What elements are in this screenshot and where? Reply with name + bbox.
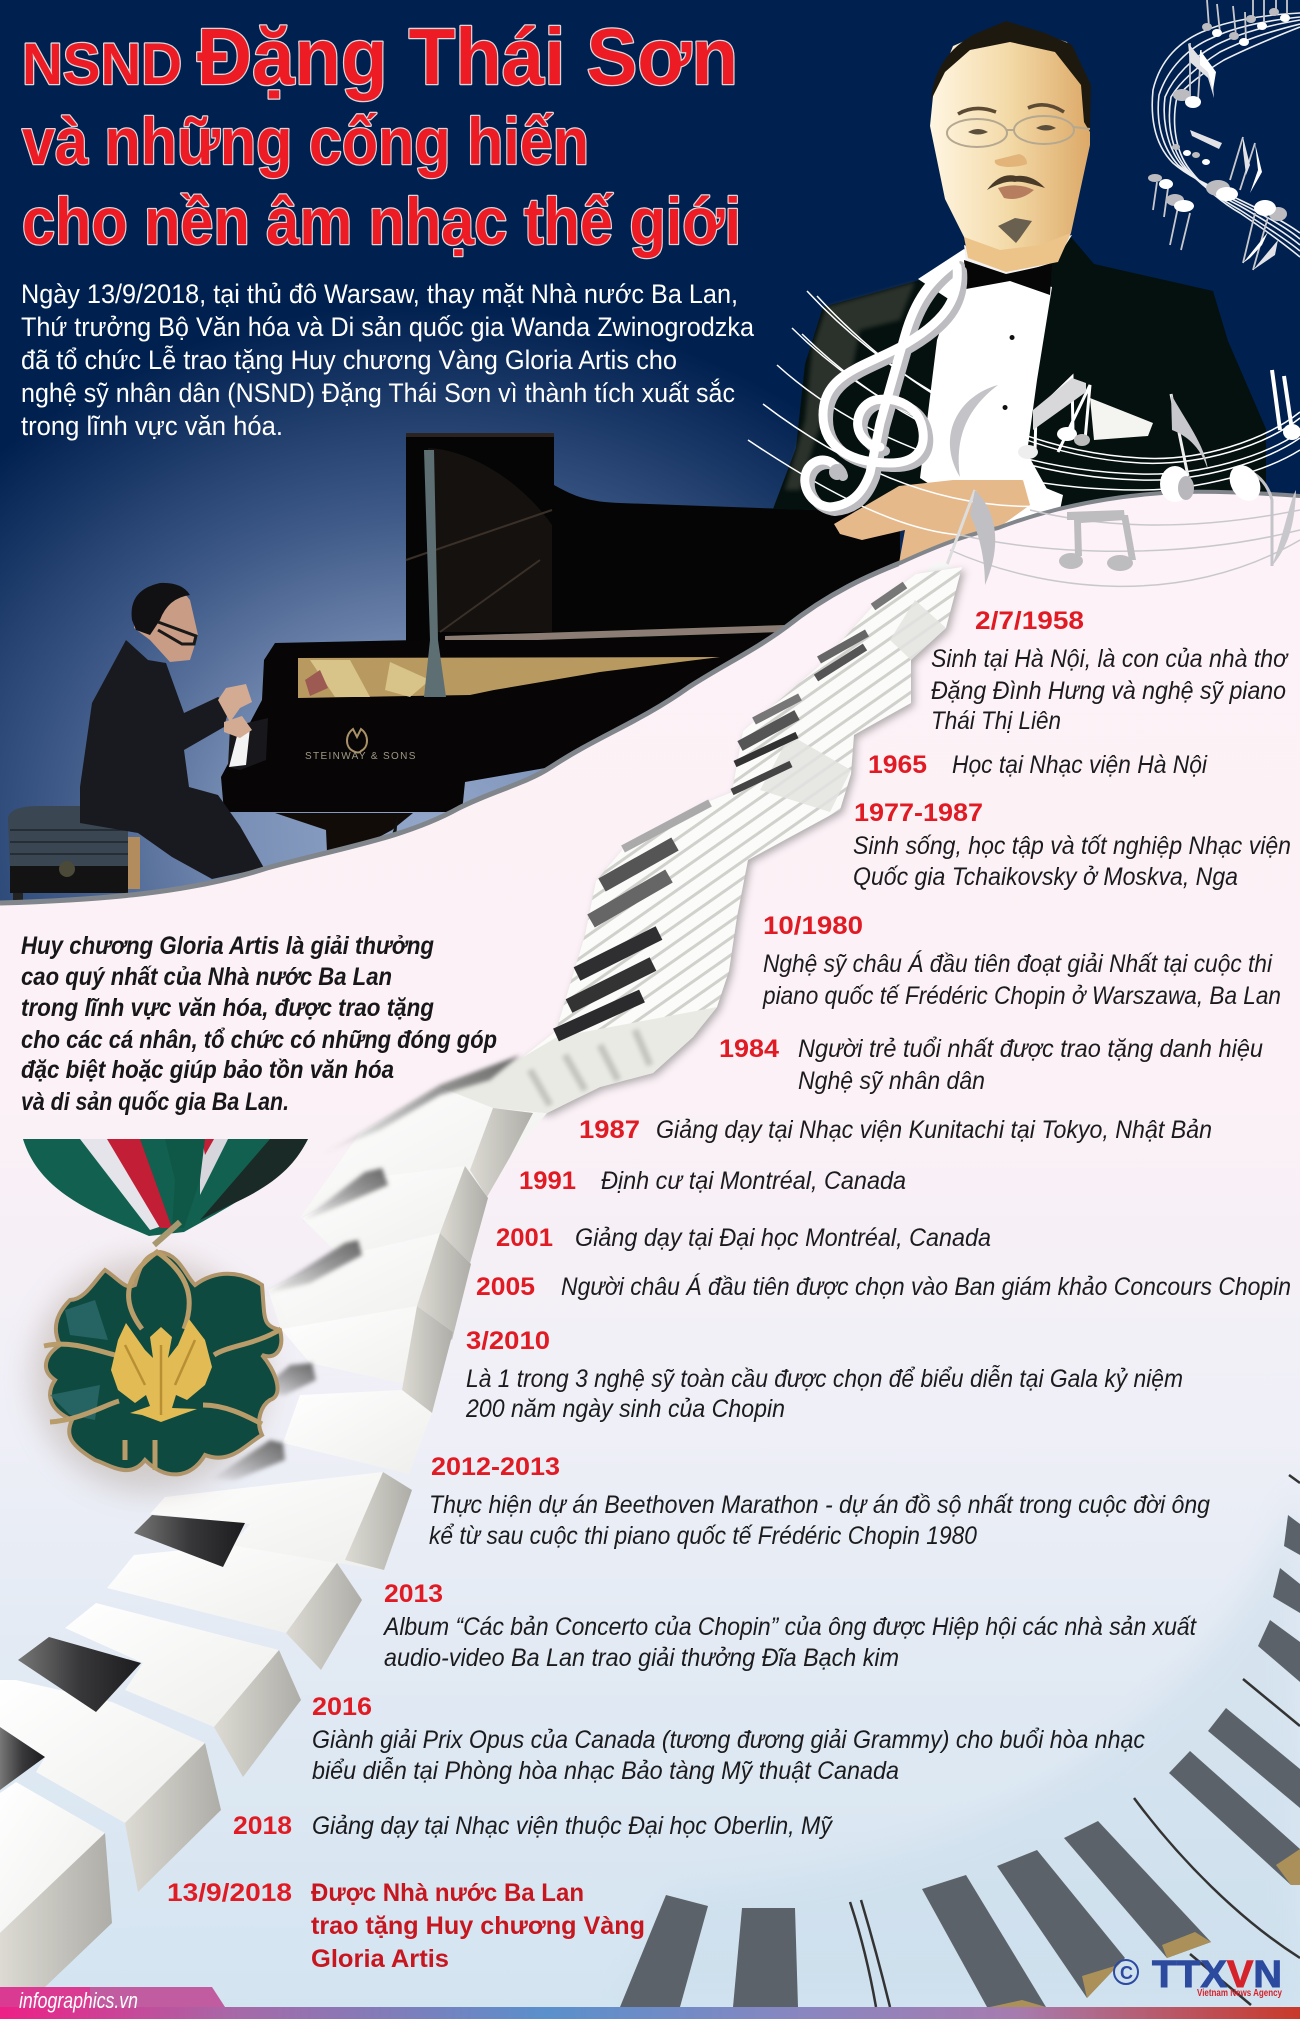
milestone 2012-2013: kể từ sau cuộc thi piano quốc tế Frédéric Chopin 1980 xyxy=(429,1522,977,1550)
medal soft shadow xyxy=(32,1257,268,1493)
beamed note on pink xyxy=(1059,510,1136,571)
piano lid xyxy=(406,433,900,720)
ribbon xyxy=(23,1139,308,1236)
milestone 1965: 1965 xyxy=(868,751,927,779)
mouth xyxy=(998,185,1034,199)
moustache xyxy=(987,175,1045,190)
tall note at right edge xyxy=(1223,370,1300,566)
agency caption: Vietnam News Agency xyxy=(1197,1988,1282,1999)
title: NSND xyxy=(22,32,182,97)
piano lid rim xyxy=(445,625,785,643)
head xyxy=(134,585,198,662)
glasses xyxy=(947,116,1090,147)
hands xyxy=(218,684,252,738)
milestone 2012-2013: Thực hiện dự án Beethoven Marathon - dự án đồ sộ nhất trong cuộc đời ông xyxy=(429,1491,1210,1519)
footer bar xyxy=(0,1987,1300,2019)
intro text block: đã tổ chức Lễ trao tặng Huy chương Vàng Gloria Artis cho xyxy=(21,344,677,375)
milestone 2018: 2018 xyxy=(233,1812,292,1840)
ribbon fold highlights xyxy=(760,600,946,812)
piano lid prop xyxy=(424,450,446,697)
milestone 1991: Định cư tại Montréal, Canada xyxy=(601,1167,906,1195)
note heads xyxy=(1148,8,1287,221)
milestone 1977-1987: 1977-1987 xyxy=(854,799,983,827)
piano legs xyxy=(275,813,413,852)
callout: Gloria Artis description: cao quý nhất của Nhà nước Ba Lan xyxy=(21,963,392,991)
gold key highlights xyxy=(990,1849,1300,2007)
neck and face xyxy=(964,233,1071,272)
upper ribbon shadow xyxy=(443,570,965,1116)
piano body xyxy=(221,640,800,812)
title: cho nền âm nhạc thế giới xyxy=(22,184,741,258)
jacket shoulder highlight xyxy=(785,282,915,490)
collar xyxy=(964,235,1072,276)
soft black keys row xyxy=(210,1055,520,1480)
hand xyxy=(834,480,1030,563)
callout: Gloria Artis description: cho các cá nhân, tổ chức có những đóng góp xyxy=(21,1026,497,1054)
jacket xyxy=(773,237,1266,528)
piano bench xyxy=(8,806,140,902)
milestone 3/2010: Là 1 trong 3 nghệ sỹ toàn cầu được chọn để biểu diễn tại Gala kỷ niệm xyxy=(466,1364,1183,1393)
milestone 2018: Giảng dạy tại Nhạc viện thuộc Đại học Oberlin, Mỹ xyxy=(312,1812,833,1840)
callout: Gloria Artis description: và di sản quốc gia Ba Lan. xyxy=(21,1088,289,1116)
milestone 1991: 1991 xyxy=(519,1167,576,1195)
medal ring xyxy=(154,1222,180,1245)
milestone 1984 xyxy=(719,1035,1263,1095)
medal gold veins xyxy=(44,1252,281,1470)
milestone 2001: 2001 xyxy=(496,1224,553,1252)
milestone 1984: Nghệ sỹ nhân dân xyxy=(798,1067,985,1095)
milestone 2013: 2013 xyxy=(384,1580,443,1608)
milestone 3/2010: 3/2010 xyxy=(466,1327,550,1355)
milestone 2013 xyxy=(382,1580,1197,1672)
dark keys xyxy=(620,1515,1300,2007)
intro text block: Ngày 13/9/2018, tại thủ đô Warsaw, thay mặt Nhà nước Ba Lan, xyxy=(21,279,738,309)
decoration: staff lines across the portrait xyxy=(748,291,1300,586)
milestone 13/9/2018: Gloria Artis xyxy=(311,1945,449,1973)
thin key separators xyxy=(850,1475,1300,2007)
logo: TTXVN xyxy=(1114,1954,1282,1999)
eyebrows xyxy=(958,105,1064,114)
intro text block: Thứ trưởng Bộ Văn hóa và Di sản quốc gia Wanda Zwinogrodzka xyxy=(21,312,755,342)
large black keys xyxy=(0,1515,245,1790)
milestone 13/9/2018 xyxy=(167,1879,645,1973)
enamel flower xyxy=(46,1252,281,1474)
medal: Gloria Artis xyxy=(23,1139,308,1493)
panel: lower light section with curved edge xyxy=(0,492,1300,2019)
milestone 2016: biểu diễn tại Phòng hòa nhạc Bảo tàng Mỹ thuật Canada xyxy=(312,1756,899,1785)
milestone 1987: Giảng dạy tại Nhạc viện Kunitachi tại Tokyo, Nhật Bản xyxy=(656,1116,1212,1144)
photo: portrait of Đặng Thái Sơn xyxy=(773,21,1266,563)
milestone 2013: audio-video Ba Lan trao giải thưởng Đĩa Bạch kim xyxy=(384,1644,899,1672)
icon: treble clef xyxy=(805,262,962,511)
illustration: circular keyboard bottom right xyxy=(620,1475,1300,2007)
copyright mark xyxy=(1114,1960,1138,1984)
milestone 1984: 1984 xyxy=(719,1035,779,1063)
flagged note xyxy=(1160,394,1208,502)
brand: STEINWAY & SONS xyxy=(305,751,418,762)
callout: Gloria Artis description: đặc biệt hoặc giúp bảo tồn văn hóa xyxy=(21,1056,394,1084)
large white keys xyxy=(0,1087,547,1997)
milestone 2013: Album “Các bản Concerto của Chopin” của ông được Hiệp hội các nhà sản xuất xyxy=(382,1613,1197,1641)
nose xyxy=(995,154,1027,167)
note stems xyxy=(1153,0,1287,270)
photo: grand piano xyxy=(221,433,900,852)
jacket and trousers xyxy=(80,640,264,879)
milestone 1958 xyxy=(931,607,1289,735)
beamed note on jacket xyxy=(1018,377,1090,459)
milestone 10/1980: 10/1980 xyxy=(763,912,863,940)
intro text block: nghệ sỹ nhân dân (NSND) Đặng Thái Sơn vì thành tích xuất sắc xyxy=(21,377,735,408)
bow tie xyxy=(964,260,1052,295)
gold eagle xyxy=(111,1319,212,1422)
milestone 1958: 2/7/1958 xyxy=(975,607,1084,635)
intro text block: trong lĩnh vực văn hóa. xyxy=(21,411,283,441)
milestone 13/9/2018: Được Nhà nước Ba Lan xyxy=(311,1879,584,1907)
piano music stand xyxy=(228,718,268,770)
milestone 2016: Giành giải Prix Opus của Canada (tương đương giải Grammy) cho buổi hòa nhạc xyxy=(312,1726,1145,1754)
eyes xyxy=(968,125,1056,134)
shirt xyxy=(920,262,1057,530)
redraw pink edge over photo xyxy=(880,492,1300,620)
milestone 1958: Thái Thị Liên xyxy=(931,707,1061,735)
grey folded band xyxy=(440,1007,717,1113)
brand logo lyre xyxy=(347,729,367,752)
milestone 2012-2013: 2012-2013 xyxy=(431,1453,560,1481)
agency name: TTXVN xyxy=(1152,1954,1282,1996)
timeline: career milestones xyxy=(167,607,1291,1973)
milestone 1965: Học tại Nhạc viện Hà Nội xyxy=(952,751,1208,779)
lighter wheel background xyxy=(620,1480,1300,2007)
milestone 1977-1987: Quốc gia Tchaikovsky ở Moskva, Nga xyxy=(853,863,1238,891)
callout: Gloria Artis description: trong lĩnh vực văn hóa, được trao tặng xyxy=(21,994,434,1022)
illustration: winding piano keyboard xyxy=(0,567,965,1997)
milestone 3/2010: 200 năm ngày sinh của Chopin xyxy=(465,1395,785,1423)
pocket square xyxy=(1090,398,1153,440)
note flags and beams xyxy=(1188,43,1278,270)
shirt studs xyxy=(1003,335,1015,410)
milestone 2005: 2005 xyxy=(476,1273,535,1301)
teal enamel highlight xyxy=(50,1300,108,1420)
milestone 2012-2013 xyxy=(429,1453,1210,1550)
source label: infographics.vn xyxy=(19,1988,138,2013)
goatee xyxy=(998,218,1032,243)
hair xyxy=(931,21,1091,132)
title: và những cống hiến xyxy=(22,104,589,178)
piano interior strings xyxy=(298,657,720,698)
cuff xyxy=(1014,475,1063,515)
milestone 13/9/2018: trao tặng Huy chương Vàng xyxy=(311,1912,645,1940)
milestone 2001: Giảng dạy tại Đại học Montréal, Canada xyxy=(575,1224,991,1252)
copyright mark: C xyxy=(1120,1963,1133,1983)
milestone 13/9/2018: 13/9/2018 xyxy=(167,1879,292,1907)
milestone 1984: Người trẻ tuổi nhất được trao tặng danh hiệu xyxy=(798,1035,1263,1063)
milestone 1987: 1987 xyxy=(579,1116,640,1144)
title xyxy=(22,12,741,258)
intro text block xyxy=(21,279,755,441)
callout: Gloria Artis description: Huy chương Gloria Artis là giải thưởng xyxy=(21,932,434,960)
milestone 2016: 2016 xyxy=(312,1693,372,1721)
photo: pianist at the keyboard xyxy=(8,583,264,902)
title: Đặng Thái Sơn xyxy=(197,12,738,101)
upper ribbon keys xyxy=(440,567,962,1113)
milestone 2016 xyxy=(312,1693,1145,1785)
upper black keys xyxy=(556,585,905,1035)
callout: Gloria Artis description xyxy=(21,932,497,1116)
milestone 10/1980 xyxy=(762,912,1281,1010)
milestone 1977-1987 xyxy=(853,799,1291,891)
icon: musical notes over portrait xyxy=(926,370,1300,588)
decoration: music staff top right xyxy=(1148,0,1300,270)
flagged note near hand xyxy=(926,490,995,588)
milestone 3/2010 xyxy=(465,1327,1183,1423)
icon: crescent xyxy=(950,385,998,477)
